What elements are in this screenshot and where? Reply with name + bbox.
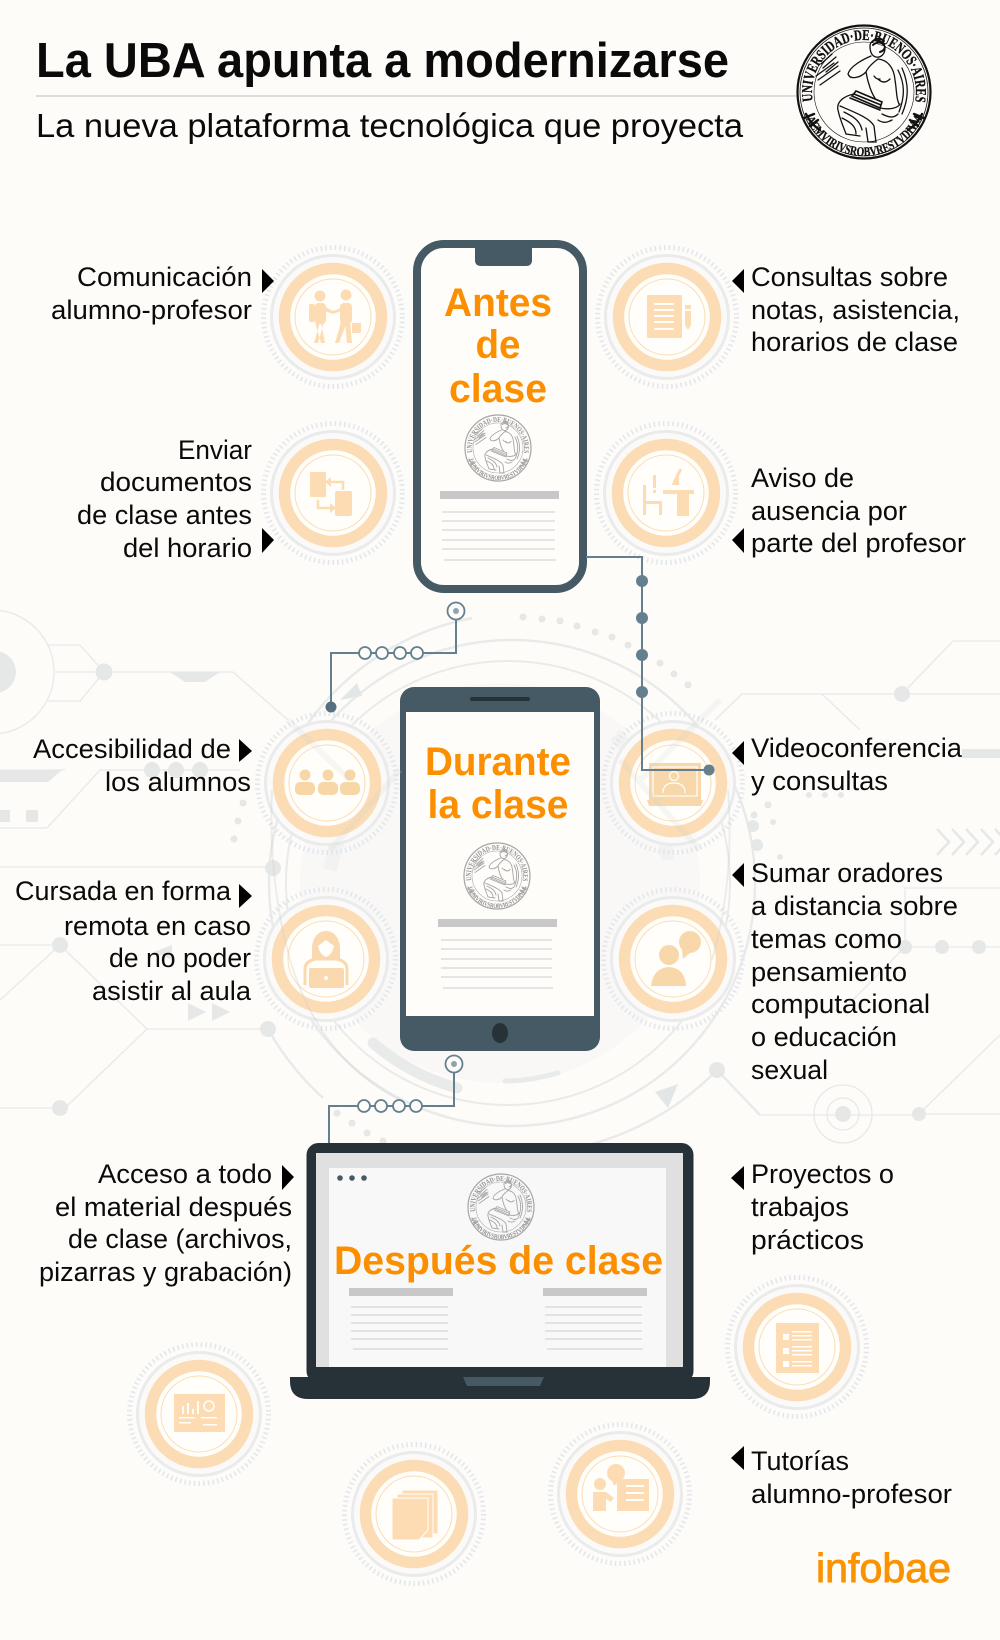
icon badge: practical projects document bbox=[728, 1278, 866, 1416]
phone: Antes de clase: de bbox=[476, 323, 520, 367]
label: Videoconferencia: Videoconferencia bbox=[751, 733, 963, 763]
label: Accesibilidad: los alumnos bbox=[105, 767, 251, 797]
label: Aviso de ausencia bbox=[732, 463, 966, 558]
label: Proyectos bbox=[731, 1159, 894, 1255]
tablet: Durante la clase: Durante bbox=[425, 740, 571, 784]
label: Sumar oradores: Sumar oradores bbox=[751, 858, 943, 888]
label: Enviar documentos: de clase antes bbox=[77, 500, 252, 530]
label: Proyectos: trabajos bbox=[751, 1192, 849, 1222]
label: Acceso al material: el material después bbox=[55, 1192, 292, 1222]
label: Accesibilidad bbox=[33, 734, 252, 797]
label: Consultas sobre notas bbox=[732, 262, 960, 357]
label: Comunicación alumno-profesor: alumno-profesor bbox=[51, 295, 252, 325]
icon badge: empty desk, teacher absent bbox=[596, 424, 736, 562]
label: Videoconferencia bbox=[732, 733, 963, 796]
connector: phone to videoconference bbox=[586, 557, 714, 776]
seal bbox=[464, 414, 532, 482]
icon badge: videoconference laptop bbox=[604, 714, 742, 852]
label: Cursada remota: remota en caso bbox=[64, 911, 251, 941]
phone: Antes de clase: Antes bbox=[444, 281, 552, 325]
label: Tutorías bbox=[731, 1446, 952, 1509]
icon badge: teacher with laptop bbox=[256, 890, 396, 1028]
label: Comunicación alumno-profesor bbox=[51, 262, 274, 325]
label: Acceso al material bbox=[39, 1159, 294, 1287]
label: Aviso de ausencia: ausencia por bbox=[751, 496, 907, 526]
seal: UNIVERSIDAD·DE·BUENOS·AIRES bbox=[467, 417, 529, 453]
label: Sumar oradores: sexual bbox=[751, 1055, 828, 1085]
label: Enviar documentos bbox=[77, 435, 274, 563]
seal: ACMVIRIVSROBVRESTVDIVM bbox=[468, 888, 526, 908]
label: Accesibilidad: Accesibilidad de bbox=[33, 734, 231, 764]
label: Cursada remota bbox=[15, 876, 252, 1006]
icon badge: student and professor handshake bbox=[264, 248, 402, 386]
icon badge: stack of files bbox=[344, 1444, 484, 1584]
seal: ACMVIRIVSROBVRESTVDIVM bbox=[472, 1218, 530, 1239]
connector: tablet to laptop bbox=[329, 1056, 462, 1143]
label: Sumar oradores: computacional bbox=[751, 989, 930, 1019]
label: Aviso de ausencia: parte del profesor bbox=[751, 528, 966, 558]
seal: Universidad de Buenos Aires: UNIVERSIDAD·DE·BUENOS·AIRES bbox=[802, 30, 926, 102]
label: Acceso al material: de clase (archivos, bbox=[68, 1224, 292, 1254]
icon badge: tutoring bbox=[550, 1424, 690, 1564]
seal bbox=[467, 1173, 535, 1241]
label: Cursada remota: asistir al aula bbox=[92, 976, 252, 1006]
tablet: Durante la clase bbox=[400, 687, 600, 1051]
label: Enviar documentos: del horario bbox=[123, 533, 252, 563]
laptop: Después de clase: Después de clase bbox=[334, 1239, 663, 1283]
label: Sumar oradores: pensamiento bbox=[751, 957, 907, 987]
icon badge: group of students bbox=[258, 714, 396, 852]
logo: infobae: infobae bbox=[816, 1545, 951, 1591]
label: Consultas sobre notas: notas, asistencia, bbox=[751, 295, 960, 325]
seal: Universidad de Buenos Aires bbox=[796, 24, 932, 160]
icon badge: remote speaker bbox=[604, 890, 742, 1028]
label: Proyectos: Proyectos o bbox=[751, 1159, 894, 1189]
phone: Antes de clase: clase bbox=[449, 367, 547, 411]
label: Tutorías: alumno-profesor bbox=[751, 1479, 952, 1509]
label: Sumar oradores: o educación bbox=[751, 1022, 897, 1052]
background: circuit decoration bbox=[0, 610, 1000, 1152]
label: Enviar documentos: documentos bbox=[100, 467, 252, 497]
seal: ACMVIRIVSROBVRESTVDIVM bbox=[469, 460, 528, 480]
connector: phone to accessibility bbox=[326, 602, 464, 712]
seal: UNIVERSIDAD·DE·BUENOS·AIRES bbox=[466, 845, 528, 881]
label: Comunicación alumno-profesor: Comunicación bbox=[77, 262, 252, 292]
label: Acceso al material: Acceso a todo bbox=[98, 1159, 272, 1189]
icon badge: notes and pencil bbox=[598, 248, 736, 386]
icon badge: presentation board bbox=[130, 1344, 268, 1484]
label: Tutorías: Tutorías bbox=[751, 1446, 849, 1476]
label: Consultas sobre notas: horarios de clase bbox=[751, 327, 958, 357]
laptop: Después de clase bbox=[290, 1143, 710, 1399]
label: Sumar oradores: a distancia sobre bbox=[751, 891, 958, 921]
phone: Antes de clase bbox=[413, 240, 587, 593]
tablet: Durante la clase: la clase bbox=[428, 783, 568, 827]
seal: Universidad de Buenos Aires: ACMVIRIVSROBVRESTVDIVM bbox=[806, 115, 922, 156]
label: Enviar documentos: Enviar bbox=[178, 435, 252, 465]
label: Acceso al material: pizarras y grabación) bbox=[39, 1257, 292, 1287]
label: Proyectos: prácticos bbox=[751, 1225, 864, 1255]
icon badge: exchange of documents bbox=[264, 424, 402, 562]
label: Sumar oradores: temas como bbox=[751, 924, 902, 954]
title: La UBA apunta a modernizarse bbox=[36, 34, 729, 88]
label: Cursada remota: de no poder bbox=[109, 943, 251, 973]
subtitle: La nueva plataforma tecnológica que proyecta bbox=[36, 107, 744, 144]
header divider bbox=[36, 95, 816, 97]
label: Aviso de ausencia: Aviso de bbox=[751, 463, 854, 493]
seal bbox=[463, 842, 531, 910]
label: Videoconferencia: y consultas bbox=[751, 766, 888, 796]
label: Cursada remota: Cursada en forma bbox=[15, 876, 232, 906]
overlay: circuit lines over the badges bbox=[271, 700, 730, 1100]
label: Consultas sobre notas: Consultas sobre bbox=[751, 262, 948, 292]
seal: UNIVERSIDAD·DE·BUENOS·AIRES bbox=[470, 1176, 532, 1212]
label: Sumar oradores bbox=[732, 858, 958, 1085]
